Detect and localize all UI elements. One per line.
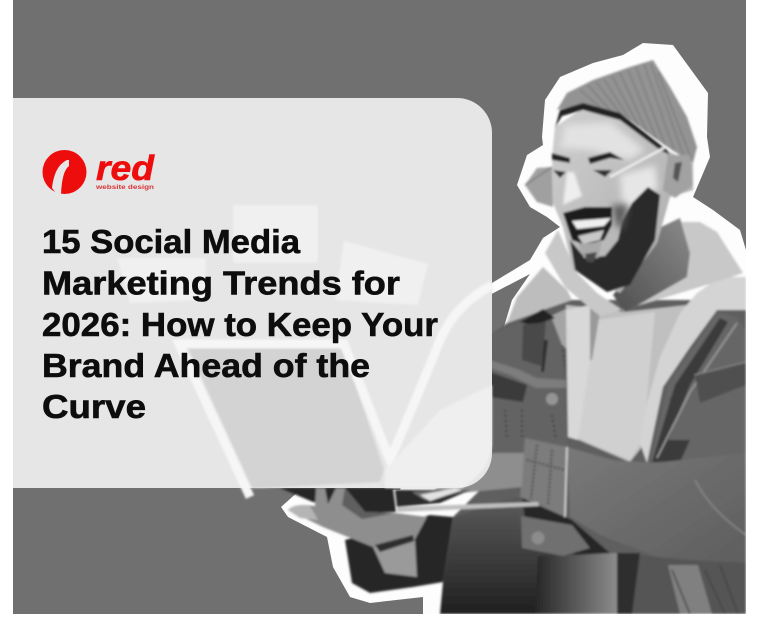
hood (545, 222, 743, 316)
forehead highlight (560, 122, 645, 160)
info card (13, 98, 492, 497)
wrist (373, 540, 417, 577)
title: 2026: How to Keep Your (42, 306, 438, 343)
sunglasses (525, 167, 553, 207)
forearm hand (434, 452, 524, 494)
fur collar left (507, 267, 572, 323)
cuff (520, 438, 567, 517)
nose (563, 172, 582, 205)
mustache and mouth (563, 207, 612, 245)
title (42, 223, 438, 425)
laptop edge (397, 502, 539, 512)
ear (663, 155, 693, 198)
faded laptop screen (187, 346, 384, 488)
title: Marketing Trends for (42, 264, 400, 302)
faded hand (385, 385, 492, 488)
cheek highlight (620, 165, 658, 212)
hat (557, 60, 697, 163)
title: Brand Ahead of the (42, 347, 370, 384)
holding hand (288, 488, 427, 547)
logo mark (42, 150, 86, 194)
hair line (555, 103, 670, 155)
neck shadow (613, 218, 690, 312)
lower jacket (438, 508, 573, 614)
left dark sleeve (345, 515, 453, 593)
fur lining left strip (551, 308, 568, 350)
pocket flap (522, 495, 610, 555)
faded social tiles (117, 205, 428, 305)
logo (42, 149, 155, 194)
jacket left panel (490, 320, 568, 460)
white sticker outline (281, 43, 746, 614)
jacket right panel (650, 312, 746, 462)
lower lip and chin patch (578, 242, 602, 258)
logo wordmark: red (96, 149, 155, 188)
face (552, 110, 693, 293)
title: Curve (42, 388, 146, 425)
sleeve (568, 447, 746, 552)
jacket left pocket flap (490, 360, 566, 388)
laptop base (280, 488, 396, 513)
faded white outline (179, 285, 492, 497)
eyebrows and eyes (552, 152, 624, 164)
fur lining right (640, 277, 746, 463)
card background (13, 98, 492, 488)
beard (570, 187, 660, 292)
person cutout (280, 43, 746, 614)
title: 15 Social Media (42, 223, 301, 260)
background gap below white stripe (492, 274, 530, 336)
hoodie chest (566, 305, 687, 462)
logo tagline: website design (95, 185, 154, 191)
jacket body (452, 298, 746, 558)
